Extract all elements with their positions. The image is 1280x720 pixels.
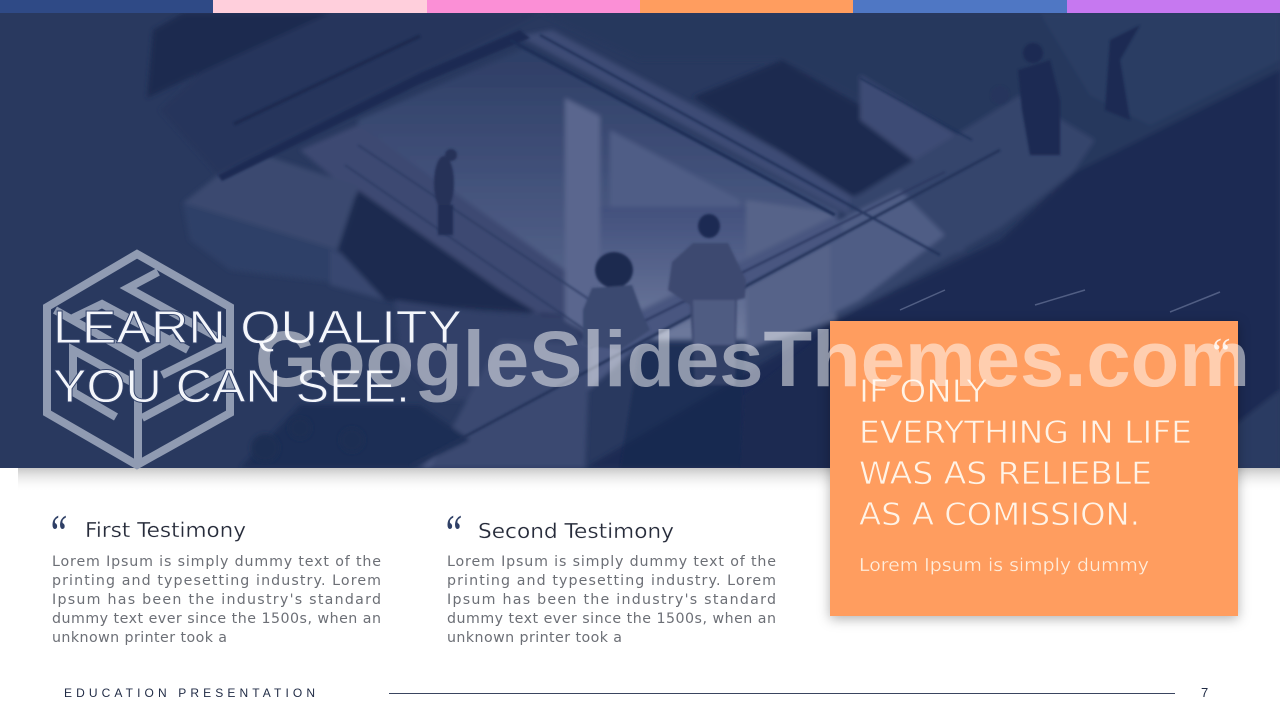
watermark text: GoogleSlidesThemes.com [255,314,1250,403]
icon: hexagon maze logo watermark [47,254,230,465]
quote headline [859,374,1192,533]
figures on the escalator [434,25,1140,468]
page number: 7 [1201,685,1208,700]
quote headline: EVERYTHING IN LIFE [859,415,1192,451]
second body text: unknown printer took a [447,630,622,646]
quote headline: IF ONLY [859,374,987,410]
second body text: Lorem Ipsum is simply dummy text of the [447,554,776,570]
first heading: First Testimony [85,518,246,542]
second body text [447,554,776,646]
first body text: dummy text ever since the 1500s, when an [52,611,381,627]
second body text: printing and typesetting industry. Lorem [447,573,776,589]
first body text [52,554,381,646]
top colour bar [0,0,1280,13]
hero photo: escalators with duotone navy [0,13,1280,468]
footer label: EDUCATION PRESENTATION [64,686,315,700]
first body text: Ipsum has been the industry's standard [52,592,381,608]
icon: second quote mark: “ [442,504,463,561]
panel: orange quote [830,321,1238,616]
quote headline: WAS AS RELIEBLE [859,456,1152,492]
icon: first quote mark: “ [47,504,68,561]
first body text: Lorem Ipsum is simply dummy text of the [52,554,381,570]
icon: white quote mark on panel: “ [1208,331,1231,377]
first body text: unknown printer took a [52,630,227,646]
testimony: first [47,504,381,646]
testimony: second [442,504,776,646]
heading: learn quality: YOU CAN SEE. [53,360,410,412]
footer [64,685,1208,700]
quote headline: AS A COMISSION. [859,497,1140,533]
hero shadow [18,468,1280,492]
second body text: dummy text ever since the 1500s, when an [447,611,776,627]
heading: learn quality: LEARN QUALITY [53,301,462,353]
quote subtext: Lorem Ipsum is simply dummy [859,556,1149,576]
second body text: Ipsum has been the industry's standard [447,592,776,608]
crowd at lower left [252,434,270,454]
second heading: Second Testimony [478,519,674,543]
heading: learn quality [53,301,462,412]
first body text: printing and typesetting industry. Lorem [52,573,381,589]
